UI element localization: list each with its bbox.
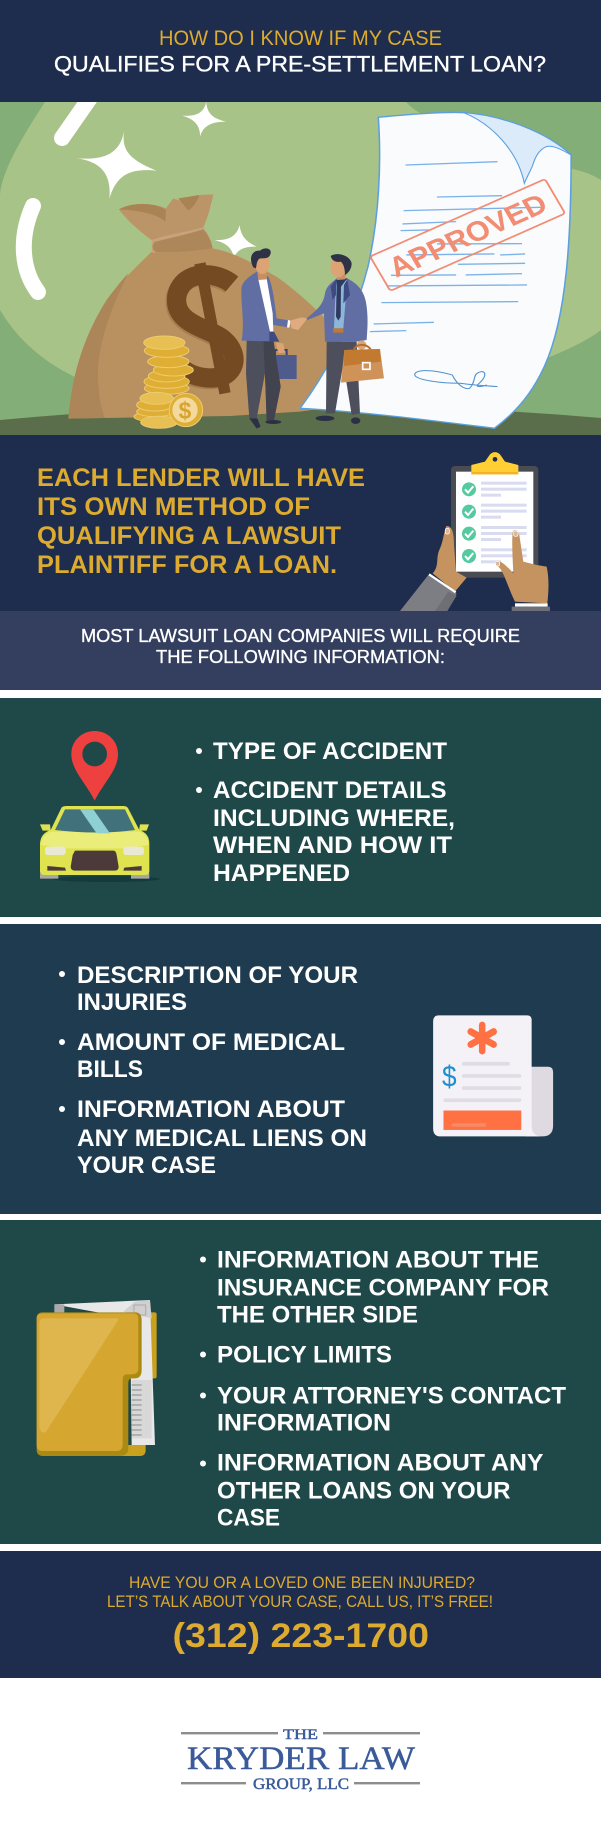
text: call to action lines bbox=[107, 1573, 493, 1611]
text: bullet list: HAPPENED bbox=[213, 860, 350, 887]
logo: The Kryder Law Group: THE bbox=[283, 1727, 318, 1743]
text: intro lines: MOST LAWSUIT LOAN COMPANIES WILL REQUIRE bbox=[81, 626, 520, 646]
text: bullet list bbox=[59, 962, 367, 1179]
icon: folder with papers bbox=[37, 1300, 157, 1456]
text: phone number: (312) 223-1700 bbox=[172, 1617, 429, 1655]
icon: coin stack: $ bbox=[179, 398, 191, 425]
panel: accident information bbox=[0, 698, 601, 917]
text: intro lines: THE FOLLOWING INFORMATION: bbox=[156, 647, 445, 667]
text: bullet list: INJURIES bbox=[77, 989, 187, 1016]
text: bullet list: ANY MEDICAL LIENS ON bbox=[77, 1125, 367, 1152]
ground bbox=[0, 410, 601, 435]
logo: The Kryder Law Group: GROUP, LLC bbox=[253, 1776, 349, 1793]
heading: lender text: QUALIFYING A LAWSUIT bbox=[37, 522, 341, 550]
bullets bbox=[200, 1256, 206, 1466]
panel: insurance information bbox=[0, 1220, 601, 1544]
figure: man with blue briefcase bbox=[241, 248, 307, 429]
icon: medical bill bbox=[433, 1015, 553, 1136]
text: bullet list: YOUR ATTORNEY'S CONTACT bbox=[217, 1382, 566, 1410]
heading: title line one: HOW DO I KNOW IF MY CASE bbox=[159, 27, 442, 50]
heading: lender text: PLAINTIFF FOR A LOAN. bbox=[37, 551, 337, 579]
text: bullet list: AMOUNT OF MEDICAL bbox=[77, 1029, 345, 1056]
text: bullet list: INFORMATION ABOUT THE bbox=[217, 1246, 539, 1274]
text: bullet list: INFORMATION bbox=[217, 1410, 391, 1436]
text: bullet list bbox=[200, 1246, 566, 1532]
stamp: approved: APPROVED bbox=[383, 188, 553, 284]
text: call to action lines: LET’S TALK ABOUT YOUR CASE, CALL US, IT’S FREE! bbox=[107, 1592, 493, 1611]
text: bullet list: INFORMATION ABOUT bbox=[77, 1096, 345, 1123]
panel: call to action bbox=[0, 1551, 601, 1678]
heading: lender text bbox=[37, 464, 365, 579]
icon: location pin and car bbox=[40, 731, 160, 882]
text: bullet list: WHEN AND HOW IT bbox=[213, 832, 452, 859]
text: bullet list bbox=[196, 738, 455, 887]
heading: title line two: QUALIFIES FOR A PRE-SETTLEMENT LOAN? bbox=[54, 52, 546, 76]
figure: man with tan briefcase bbox=[307, 254, 384, 424]
text: bullet list: BILLS bbox=[77, 1056, 143, 1083]
logo: The Kryder Law Group bbox=[181, 1727, 420, 1793]
text: bullet list: YOUR CASE bbox=[77, 1152, 216, 1179]
text: bullet list: OTHER LOANS ON YOUR bbox=[217, 1478, 510, 1504]
panel: required information intro bbox=[0, 611, 601, 690]
logo: The Kryder Law Group: KRYDER LAW bbox=[187, 1741, 416, 1777]
text: bullet list: POLICY LIMITS bbox=[217, 1342, 392, 1368]
icon: medical bill: $ bbox=[442, 1061, 457, 1094]
text: bullet list: INSURANCE COMPANY FOR bbox=[217, 1274, 549, 1302]
text: bullet list: THE OTHER SIDE bbox=[217, 1302, 418, 1328]
icon: dollar sign on bag bbox=[175, 263, 234, 393]
text: bullet list: CASE bbox=[217, 1504, 280, 1532]
heading: lender text: ITS OWN METHOD OF bbox=[37, 493, 310, 521]
icon: coin stack bbox=[134, 336, 203, 428]
text: bullet list: INFORMATION ABOUT ANY bbox=[217, 1450, 544, 1476]
panel: lender statement bbox=[0, 435, 601, 611]
text: call to action lines: HAVE YOU OR A LOVED ONE BEEN INJURED? bbox=[129, 1573, 475, 1592]
heading: lender text: EACH LENDER WILL HAVE bbox=[37, 464, 365, 492]
icon: document bbox=[300, 112, 571, 428]
text: bullet list: INCLUDING WHERE, bbox=[213, 805, 455, 832]
icon: sparkles bbox=[77, 102, 257, 258]
panel: injury information bbox=[0, 924, 601, 1214]
bullets bbox=[196, 748, 202, 793]
panel: hero illustration bbox=[0, 95, 601, 435]
icon: clipboard held by hands bbox=[400, 452, 550, 611]
panel: header bbox=[0, 0, 601, 102]
icon: white arcs bbox=[24, 95, 92, 292]
text: bullet list: DESCRIPTION OF YOUR bbox=[77, 962, 358, 989]
bullets bbox=[59, 971, 65, 1112]
text: intro lines bbox=[81, 626, 520, 667]
text: bullet list: ACCIDENT DETAILS bbox=[213, 777, 446, 804]
icon: money bag bbox=[68, 194, 327, 419]
text: bullet list: TYPE OF ACCIDENT bbox=[213, 738, 447, 765]
